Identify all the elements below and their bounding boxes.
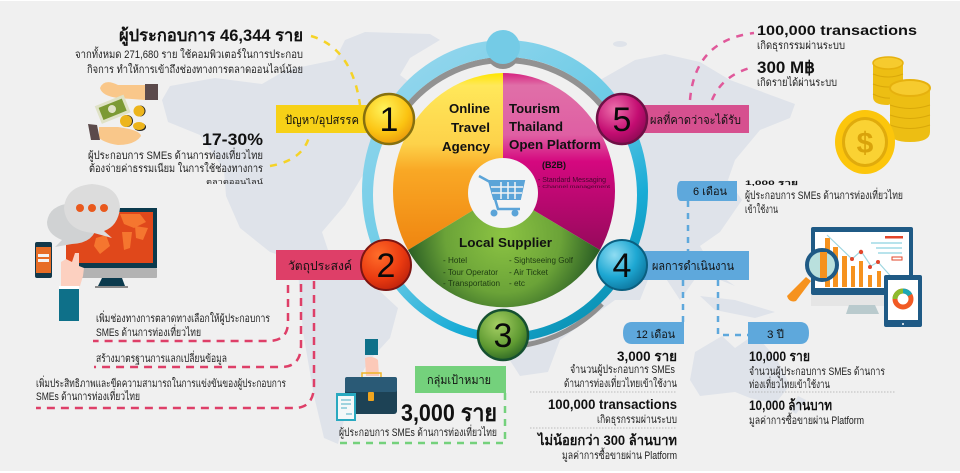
icon: briefcase with clipboard (336, 339, 397, 421)
hub circle (468, 158, 538, 228)
number badge 2: 2 (377, 247, 395, 285)
timeline tag: 12 months (623, 322, 684, 344)
dashed connector: problem items (270, 36, 360, 166)
heading bar: problems: ปัญหา/อุปสรรค (285, 113, 359, 128)
text block: 6 month results: เข้าใช้งาน (745, 203, 778, 216)
label: tourism thailand open platform: Tourism (509, 101, 560, 116)
timeline tag: 6 months (677, 181, 737, 201)
icon: analytics monitor with magnifier and tablet (787, 227, 922, 327)
dashed connector: target group (336, 393, 505, 443)
heading bar: problems (276, 105, 371, 133)
number badge 2 (361, 240, 411, 290)
label: online travel agency (442, 101, 491, 154)
heading bar: target group (415, 366, 506, 393)
world map background (162, 32, 806, 444)
icon: stacks of gold coins (835, 57, 930, 174)
text block: objective 1: SMEs ด้านการท่องเที่ยวไทย (96, 324, 201, 339)
text block: 6 month results: 1,000 ราย (745, 180, 798, 187)
label: tourism thailand open platform: (B2B) (542, 160, 566, 170)
label: tourism thailand open platform: Thailand (509, 119, 563, 134)
label: local supplier: - etc (509, 279, 525, 288)
text block: 12 month results: มูลค่าการซื้อขายผ่าน Platform (562, 447, 677, 462)
label: local supplier: - Sightseeing Golf (509, 256, 574, 265)
dashed connector: expected result items (690, 33, 754, 100)
label: local supplier: - Transportation (443, 279, 500, 288)
icon: shopping cart (479, 176, 524, 216)
text block: 12 month results: ด้านการท่องเที่ยวไทยเข้าใช้งาน (564, 375, 677, 390)
heading bar: objectives: วัตถุประสงค์ (288, 259, 352, 274)
label: tourism thailand open platform: - Standard Messaging (538, 177, 606, 184)
number badge 3: 3 (494, 317, 512, 355)
label: tourism thailand open platform (509, 101, 610, 190)
label: online travel agency: Online (449, 101, 490, 116)
heading bar: target group: กลุ่มเป้าหมาย (427, 373, 491, 388)
label: local supplier: - Tour Operator (443, 268, 498, 277)
number badge 4: 4 (613, 247, 631, 285)
text block: target group: ผู้ประกอบการ SMEs ด้านการท่องเที่ยวไทย (339, 424, 497, 439)
text block: operators without online access: จากทั้งหมด 271,680 ราย ใช้คอมพิวเตอร์ในการประกอบ (75, 46, 303, 61)
text block: operators without online access: กิจการ ทำให้การเข้าถึงช่องทางการตลาดออนไลน์น้อย (87, 63, 303, 76)
text block: expected revenue: 300 M฿ (757, 58, 815, 77)
number badge 1 (364, 94, 414, 144)
text block: 12 month results: จำนวนผู้ประกอบการ SMEs (570, 364, 675, 376)
dashed connector: performance timeline (683, 201, 748, 335)
number badge 4 (597, 240, 647, 290)
timeline tag: 6 months: 6 เดือน (693, 185, 727, 198)
heading bar: performance (640, 251, 749, 280)
heading bar: objectives (276, 250, 371, 280)
text block: 6 month results (745, 180, 903, 216)
text block: objective 1: เพิ่มช่องทางการตลาดทางเลือกให้ผู้ประกอบการ (96, 310, 270, 325)
number badge 5 (597, 94, 647, 144)
sector: online travel agency (393, 73, 503, 250)
text block: 6 month results: ผู้ประกอบการ SMEs ด้านการท่องเที่ยวไทย (745, 187, 903, 202)
label: tourism thailand open platform: Open Platform (509, 137, 601, 152)
number badge 3 (478, 310, 528, 360)
text block: 12 month results: ไม่น้อยกว่า 300 ล้านบาท (536, 431, 677, 448)
text block: 3 year results: จำนวนผู้ประกอบการ SMEs ด้านการ (749, 366, 885, 378)
text block: expected transactions: เกิดธุรกรรมผ่านระบบ (757, 40, 845, 52)
text block: target group: 3,000 ราย (401, 400, 497, 427)
label: tourism thailand open platform: - Channel management (538, 185, 610, 190)
number badge 5: 5 (613, 101, 631, 139)
text block: 12 month results: 3,000 ราย (617, 348, 677, 364)
text block: objective 1 (96, 310, 270, 339)
text block: expected transactions (757, 22, 917, 52)
text block: 3 year results (749, 348, 895, 427)
text block: operators without online access: ผู้ประกอบการ 46,344 ราย (119, 26, 303, 47)
text block: commission fee: ผู้ประกอบการ SMEs ด้านการท่องเที่ยวไทย (88, 147, 263, 162)
icon: hands exchanging money (88, 82, 158, 145)
label: local supplier: - Hotel (443, 256, 467, 265)
text block: commission fee (88, 130, 263, 185)
text block: 12 month results: 100,000 transactions (548, 396, 677, 412)
panel: pie with three sectors (393, 73, 615, 307)
label: local supplier (443, 235, 574, 288)
label: online travel agency: Agency (442, 139, 491, 154)
text block: 3 year results: มูลค่าการซื้อขายผ่าน Platform (749, 412, 864, 427)
text block: target group (339, 400, 497, 439)
text block: objective 2: สร้างมาตรฐานการแลกเปลี่ยนข้อมูล (96, 350, 227, 365)
text block: 3 year results: 10,000 ราย (749, 348, 810, 364)
text block: 3 year results: 10,000 ล้านบาท (749, 397, 832, 413)
text block: commission fee: ต้องจ่ายค่าธรรมเนียม ในการใช้ช่องทางการ (89, 162, 263, 175)
text block: 12 month results (530, 348, 677, 462)
dashed connector: objectives (36, 281, 314, 408)
text block: 3 year results: ท่องเที่ยวไทยเข้าใช้งาน (749, 376, 830, 391)
text block: 12 month results: เกิดธุรกรรมผ่านระบบ (597, 414, 677, 426)
heading bar: expected results: ผลที่คาดว่าจะได้รับ (650, 111, 741, 127)
label: online travel agency: Travel (451, 120, 490, 135)
text block: objective 3: เพิ่มประสิทธิภาพและขีดความสามารถในการแข่งขันของผู้ประกอบการ (36, 375, 286, 390)
text block: objective 3: SMEs ด้านการท่องเที่ยวไทย (36, 388, 140, 403)
label: local supplier: Local Supplier (459, 235, 552, 250)
text block: operators without online access (75, 26, 303, 76)
number badge 1: 1 (380, 101, 398, 139)
text block: expected revenue: เกิดรายได้ผ่านระบบ (757, 76, 837, 89)
text block: expected revenue (757, 58, 837, 89)
icon: stacks of gold coins: $ (857, 127, 874, 160)
heading bar: expected results (640, 105, 749, 133)
sector: tourism thailand open platform (503, 73, 615, 250)
timeline tag: 3 years (748, 322, 809, 344)
panel: central ring (362, 30, 648, 345)
heading bar: performance: ผลการดำเนินงาน (652, 259, 734, 273)
text block: objective 3 (36, 375, 286, 403)
sector: local supplier (408, 192, 600, 307)
label: local supplier: - Air Ticket (509, 268, 549, 277)
timeline tag: 12 months: 12 เดือน (636, 328, 675, 341)
text block: expected transactions: 100,000 transactions (757, 22, 917, 38)
timeline tag: 3 years: 3 ปี (767, 328, 784, 341)
text block: commission fee: 17-30% (202, 130, 263, 149)
icon: monitor with chat bubbles and phone (35, 184, 157, 321)
text block: commission fee: ตลาดออนไลน์ (206, 177, 263, 185)
